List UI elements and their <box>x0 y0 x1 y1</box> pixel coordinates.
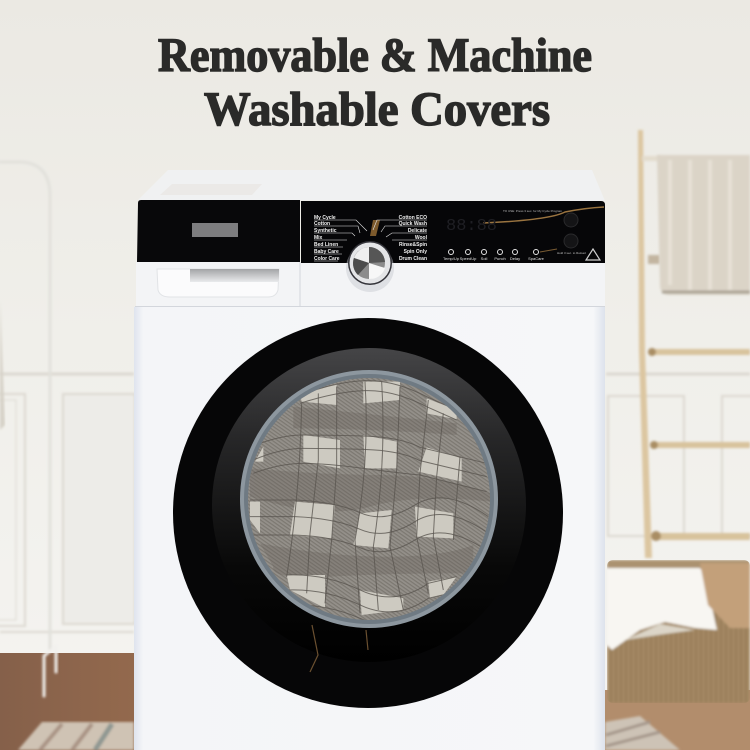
title: Washable Covers <box>204 83 550 136</box>
drawer section <box>136 262 300 307</box>
white cloth <box>607 568 717 650</box>
logo triangle <box>586 249 600 260</box>
function labels: Soil <box>481 256 487 261</box>
light checks <box>250 382 462 615</box>
door <box>173 318 563 708</box>
digital readout: 88:88 <box>446 217 497 236</box>
ladder top bar <box>642 156 660 161</box>
function icons <box>448 250 538 254</box>
reflection streak lower <box>540 249 557 252</box>
function labels: Temp/Up <box>443 256 460 261</box>
cycle labels left: Cotton <box>314 221 330 227</box>
reflection streak <box>483 207 604 223</box>
hanging cloth on rack <box>0 300 5 430</box>
dial reflection <box>370 220 380 236</box>
floor left <box>0 653 134 750</box>
cycle labels right: Delicate <box>408 228 427 234</box>
ladder <box>638 130 750 558</box>
wall wainscot panels <box>0 374 750 632</box>
cycle labels left: Baby Care <box>314 249 339 255</box>
machine body <box>134 307 605 750</box>
washing machine <box>134 170 605 750</box>
black panel right <box>301 201 605 263</box>
hold to release note: Hold 3 sec. to Reload <box>557 251 586 255</box>
top label sticker <box>160 184 262 195</box>
cycle labels left: Synthetic <box>314 228 337 234</box>
plaid horizontal lines <box>250 381 488 625</box>
function labels: SpaCare <box>528 256 545 261</box>
rug right <box>605 716 680 750</box>
rug left <box>18 722 134 750</box>
door glass rim <box>240 370 498 628</box>
tan cloth <box>700 563 750 628</box>
display window <box>192 223 238 237</box>
detergent drawer handle <box>157 269 279 297</box>
cycle labels left: Bed Linen <box>314 242 338 248</box>
divider lines <box>135 262 605 307</box>
function labels: Punch <box>494 256 506 261</box>
towel on ladder <box>657 155 750 295</box>
basket <box>607 560 750 703</box>
top note: TO USE: Press 3 sec. for My Cycle Program <box>503 209 563 213</box>
floor right <box>605 690 750 750</box>
cycle labels left <box>314 215 340 262</box>
door reflections <box>310 625 368 672</box>
title: Removable & Machine <box>158 29 592 82</box>
ladder rungs <box>650 349 750 540</box>
plaid vertical lines <box>287 382 460 613</box>
door outer ring <box>173 318 563 708</box>
cycle labels right: Wool <box>415 235 428 241</box>
cycle labels right: Spin Only <box>404 249 427 255</box>
basket rim <box>607 560 750 569</box>
cycle labels right: Drum Clean <box>399 256 427 262</box>
machine top <box>138 170 605 201</box>
door inner ring <box>212 348 526 662</box>
cycle labels right <box>399 215 428 262</box>
title <box>158 29 592 136</box>
lower control section <box>300 262 605 307</box>
cycle labels left: My Cycle <box>314 215 336 221</box>
cycle labels left: Color Care <box>314 256 340 262</box>
cycle labels right: Quick Wash <box>399 221 427 227</box>
ladder bracket <box>648 255 660 264</box>
round buttons <box>564 213 578 248</box>
cycle labels right: Rinse&Spin <box>399 242 427 248</box>
rung knots <box>648 348 661 541</box>
coat rack <box>0 162 56 696</box>
function labels: Delay <box>510 256 520 261</box>
function labels <box>443 256 545 261</box>
basket body <box>607 610 750 703</box>
ladder pole <box>638 130 652 558</box>
function labels: SpeedUp <box>460 256 477 261</box>
black panel left <box>137 200 300 262</box>
plaid fabric <box>248 378 490 620</box>
cycle labels left: Mix <box>314 235 323 241</box>
dark wide bands <box>250 407 490 577</box>
cycle leader lines <box>314 220 427 261</box>
selector knob <box>346 241 394 292</box>
cycle labels right: Cotton ECO <box>399 215 427 221</box>
